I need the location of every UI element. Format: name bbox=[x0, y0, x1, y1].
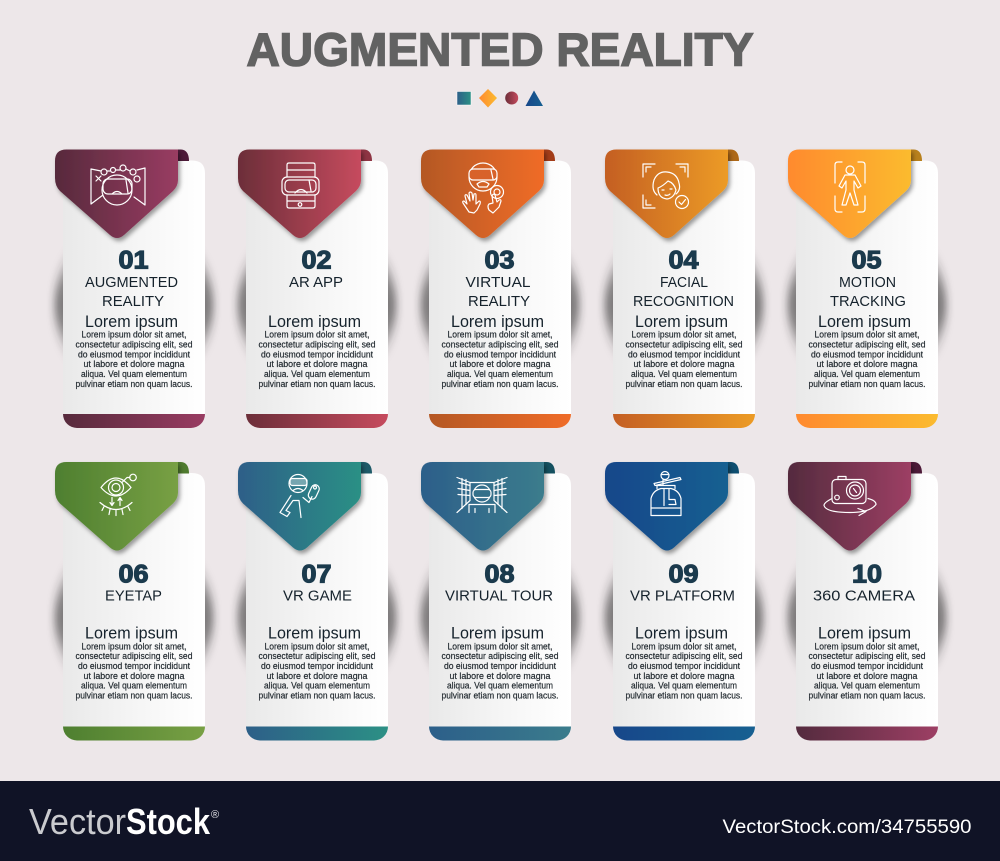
ribbon fold bbox=[909, 462, 922, 474]
label: 360 CAMERA bbox=[813, 588, 915, 604]
body text: consectetur adipiscing elit, sed bbox=[76, 340, 193, 350]
body text: consectetur adipiscing elit, sed bbox=[808, 651, 926, 661]
subheading: Lorem ipsum bbox=[85, 624, 178, 642]
subheading: Lorem ipsum bbox=[635, 313, 728, 331]
body text: ut labore et dolore magna bbox=[634, 359, 735, 369]
card body bbox=[246, 160, 388, 414]
body text: aliqua. Vel quam elementum bbox=[447, 369, 553, 379]
icon: eye with lens bbox=[100, 474, 136, 516]
footer image id: VectorStock.com/34755590 bbox=[722, 816, 972, 838]
body text: do eiusmod tempor incididunt bbox=[78, 661, 191, 671]
ribbon bbox=[421, 150, 544, 238]
subheading: Lorem ipsum bbox=[635, 624, 728, 642]
ribbon bbox=[238, 462, 361, 550]
ribbon bbox=[605, 462, 728, 550]
panel: card 03 virtual reality bbox=[420, 150, 580, 428]
body text: pulvinar etiam non quam lacus. bbox=[258, 690, 376, 700]
panel: card 10 360 camera bbox=[787, 462, 947, 740]
footer logo bbox=[29, 801, 219, 842]
icon: player with controller bbox=[280, 474, 321, 518]
bottom bar bbox=[63, 726, 205, 740]
footer logo: Stock bbox=[126, 801, 211, 842]
ribbon fold bbox=[359, 150, 372, 161]
card body bbox=[613, 160, 755, 414]
label: TRACKING bbox=[830, 293, 906, 310]
body text: Lorem ipsum dolor sit amet, bbox=[814, 330, 920, 340]
body text bbox=[442, 641, 559, 700]
number: 08 bbox=[484, 560, 515, 588]
card body bbox=[429, 160, 571, 414]
panel: card 07 vr game bbox=[237, 462, 397, 740]
ribbon fold bbox=[909, 150, 922, 161]
body text: Lorem ipsum dolor sit amet, bbox=[82, 641, 186, 651]
body text: ut labore et dolore magna bbox=[266, 671, 368, 681]
footer band bbox=[0, 781, 1000, 861]
label bbox=[633, 274, 734, 310]
card body bbox=[796, 160, 938, 414]
ribbon bbox=[788, 462, 911, 550]
body text: aliqua. Vel quam elementum bbox=[814, 681, 920, 691]
bottom bar bbox=[796, 726, 938, 740]
body text: consectetur adipiscing elit, sed bbox=[258, 651, 376, 661]
panel: card 04 facial recognition bbox=[604, 150, 764, 428]
body text: ut labore et dolore magna bbox=[816, 671, 918, 681]
subheading: Lorem ipsum bbox=[451, 313, 544, 331]
icon: headset in virtual corridor bbox=[457, 478, 507, 512]
body text: pulvinar etiam non quam lacus. bbox=[442, 690, 558, 700]
body text: consectetur adipiscing elit, sed bbox=[808, 340, 926, 350]
label: VIRTUAL bbox=[466, 274, 530, 291]
label: VR GAME bbox=[283, 588, 352, 604]
body text: do eiusmod tempor incididunt bbox=[811, 661, 924, 671]
body text: Lorem ipsum dolor sit amet, bbox=[814, 641, 920, 651]
body text: pulvinar etiam non quam lacus. bbox=[76, 379, 192, 389]
number: 06 bbox=[118, 560, 148, 588]
body text: Lorem ipsum dolor sit amet, bbox=[448, 641, 552, 651]
label bbox=[466, 274, 530, 310]
number: 03 bbox=[484, 246, 514, 274]
footer logo: ® bbox=[211, 809, 219, 821]
number: 07 bbox=[302, 560, 332, 588]
body text: do eiusmod tempor incididunt bbox=[628, 349, 741, 359]
body text: ut labore et dolore magna bbox=[84, 671, 185, 681]
body text: Lorem ipsum dolor sit amet, bbox=[264, 330, 370, 340]
body text bbox=[808, 641, 926, 700]
body text: pulvinar etiam non quam lacus. bbox=[76, 690, 192, 700]
card body bbox=[796, 473, 938, 726]
ribbon fold bbox=[176, 150, 189, 161]
card body bbox=[246, 473, 388, 726]
label: REALITY bbox=[468, 293, 530, 310]
bottom bar bbox=[63, 414, 205, 428]
number: 10 bbox=[852, 560, 882, 588]
body text: aliqua. Vel quam elementum bbox=[264, 369, 370, 379]
panel: card 08 virtual tour bbox=[420, 462, 580, 740]
body text: pulvinar etiam non quam lacus. bbox=[626, 690, 742, 700]
ribbon bbox=[788, 150, 911, 238]
ribbon fold bbox=[176, 462, 189, 474]
body text bbox=[258, 641, 376, 700]
label: RECOGNITION bbox=[633, 293, 734, 310]
body text: pulvinar etiam non quam lacus. bbox=[626, 379, 742, 389]
label: AR APP bbox=[289, 274, 343, 291]
label bbox=[830, 274, 906, 310]
body text: aliqua. Vel quam elementum bbox=[631, 369, 737, 379]
body text: ut labore et dolore magna bbox=[450, 671, 551, 681]
bottom bar bbox=[613, 726, 755, 740]
body text: ut labore et dolore magna bbox=[450, 359, 551, 369]
number: 04 bbox=[668, 246, 699, 274]
number: 09 bbox=[668, 560, 698, 588]
body text bbox=[626, 641, 743, 700]
ribbon bbox=[605, 150, 728, 238]
panel: card 02 ar app bbox=[237, 150, 397, 428]
body text: do eiusmod tempor incididunt bbox=[444, 661, 557, 671]
label: REALITY bbox=[102, 293, 164, 310]
icon: body in tracking frame bbox=[835, 162, 865, 212]
body text: Lorem ipsum dolor sit amet, bbox=[264, 641, 370, 651]
body text: consectetur adipiscing elit, sed bbox=[442, 340, 559, 350]
icon: headset with hands bbox=[463, 163, 504, 213]
label: VIRTUAL TOUR bbox=[445, 588, 553, 604]
body text: consectetur adipiscing elit, sed bbox=[442, 651, 559, 661]
body text: consectetur adipiscing elit, sed bbox=[76, 651, 193, 661]
body text: pulvinar etiam non quam lacus. bbox=[442, 379, 558, 389]
ribbon fold bbox=[726, 150, 739, 161]
body text: aliqua. Vel quam elementum bbox=[447, 681, 553, 691]
ribbon bbox=[55, 150, 178, 238]
number: 01 bbox=[118, 246, 149, 274]
body text: aliqua. Vel quam elementum bbox=[631, 681, 737, 691]
card body bbox=[63, 473, 205, 726]
number: 02 bbox=[302, 246, 332, 274]
body text: Lorem ipsum dolor sit amet, bbox=[448, 330, 552, 340]
ribbon fold bbox=[359, 462, 372, 474]
subheading: Lorem ipsum bbox=[818, 624, 911, 642]
decorative shapes row bbox=[457, 89, 543, 108]
title: AUGMENTED REALITY bbox=[246, 24, 754, 76]
icon: 360 camera bbox=[824, 476, 876, 516]
subheading: Lorem ipsum bbox=[268, 313, 361, 331]
number: 05 bbox=[852, 246, 882, 274]
icon: headset in virtual room bbox=[91, 165, 145, 205]
bottom bar bbox=[613, 414, 755, 428]
panel: card 01 augmented reality bbox=[54, 150, 214, 428]
panel: card 06 eyetap bbox=[54, 462, 214, 740]
body text: pulvinar etiam non quam lacus. bbox=[808, 379, 926, 389]
body text: do eiusmod tempor incididunt bbox=[811, 349, 924, 359]
body text: ut labore et dolore magna bbox=[816, 359, 918, 369]
ribbon bbox=[421, 462, 544, 550]
body text: do eiusmod tempor incididunt bbox=[261, 661, 374, 671]
label: AUGMENTED bbox=[85, 274, 178, 291]
label: VR PLATFORM bbox=[630, 588, 735, 604]
body text: consectetur adipiscing elit, sed bbox=[626, 340, 743, 350]
body text: pulvinar etiam non quam lacus. bbox=[258, 379, 376, 389]
body text: aliqua. Vel quam elementum bbox=[264, 681, 370, 691]
subheading: Lorem ipsum bbox=[818, 313, 911, 331]
body text: aliqua. Vel quam elementum bbox=[814, 369, 920, 379]
bottom bar bbox=[429, 414, 571, 428]
ribbon bbox=[55, 462, 178, 550]
body text bbox=[258, 330, 376, 389]
ribbon bbox=[238, 150, 361, 238]
panel: card 09 vr platform bbox=[604, 462, 764, 740]
body text: do eiusmod tempor incididunt bbox=[261, 349, 374, 359]
body text bbox=[626, 330, 743, 389]
card body bbox=[63, 160, 205, 414]
body text: ut labore et dolore magna bbox=[266, 359, 368, 369]
body text bbox=[76, 641, 193, 700]
body text: Lorem ipsum dolor sit amet, bbox=[632, 641, 736, 651]
label: EYETAP bbox=[105, 588, 162, 604]
body text: ut labore et dolore magna bbox=[634, 671, 735, 681]
bottom bar bbox=[796, 414, 938, 428]
body text: consectetur adipiscing elit, sed bbox=[626, 651, 743, 661]
body text: do eiusmod tempor incididunt bbox=[628, 661, 741, 671]
subheading: Lorem ipsum bbox=[85, 313, 178, 331]
ribbon fold bbox=[542, 150, 555, 161]
body text bbox=[808, 330, 926, 389]
icon: face scan bbox=[643, 164, 688, 208]
icon: vr motion platform bbox=[651, 472, 681, 516]
body text: do eiusmod tempor incididunt bbox=[78, 349, 191, 359]
card body bbox=[613, 473, 755, 726]
body text: aliqua. Vel quam elementum bbox=[81, 369, 187, 379]
body text bbox=[76, 330, 193, 389]
body text: consectetur adipiscing elit, sed bbox=[258, 340, 376, 350]
body text: ut labore et dolore magna bbox=[84, 359, 185, 369]
ribbon fold bbox=[726, 462, 739, 474]
card body bbox=[429, 473, 571, 726]
label: MOTION bbox=[839, 274, 896, 291]
subheading: Lorem ipsum bbox=[268, 624, 361, 642]
ribbon fold bbox=[542, 462, 555, 474]
footer logo: Vector bbox=[29, 801, 126, 842]
bottom bar bbox=[246, 414, 388, 428]
bottom bar bbox=[246, 726, 388, 740]
label bbox=[85, 274, 178, 310]
body text: aliqua. Vel quam elementum bbox=[81, 681, 187, 691]
body text: do eiusmod tempor incididunt bbox=[444, 349, 557, 359]
bottom bar bbox=[429, 726, 571, 740]
body text: Lorem ipsum dolor sit amet, bbox=[632, 330, 736, 340]
icon: tablet with goggles bbox=[282, 163, 319, 208]
body text: Lorem ipsum dolor sit amet, bbox=[82, 330, 186, 340]
body text: pulvinar etiam non quam lacus. bbox=[808, 690, 926, 700]
label: FACIAL bbox=[660, 274, 708, 291]
subheading: Lorem ipsum bbox=[451, 624, 544, 642]
body text bbox=[442, 330, 559, 389]
panel: card 05 motion tracking bbox=[787, 150, 947, 428]
